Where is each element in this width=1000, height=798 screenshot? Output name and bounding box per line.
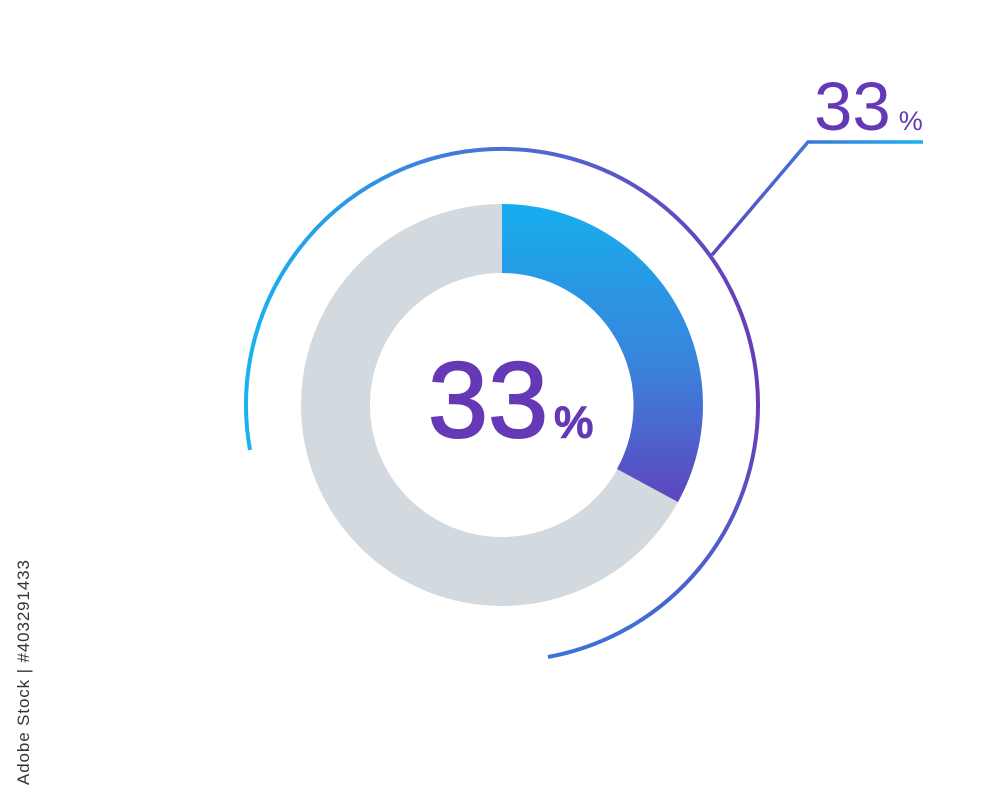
vertical stock id text: Adobe Stock | #403291433 bbox=[14, 560, 33, 785]
donut segment 33% bbox=[502, 204, 703, 502]
outer arc bbox=[246, 149, 758, 657]
center value 33%: 33% bbox=[428, 339, 593, 460]
label: 33% top right: 33 % bbox=[814, 68, 923, 145]
donut background ring bbox=[336, 238, 668, 572]
leader line bbox=[712, 142, 923, 255]
